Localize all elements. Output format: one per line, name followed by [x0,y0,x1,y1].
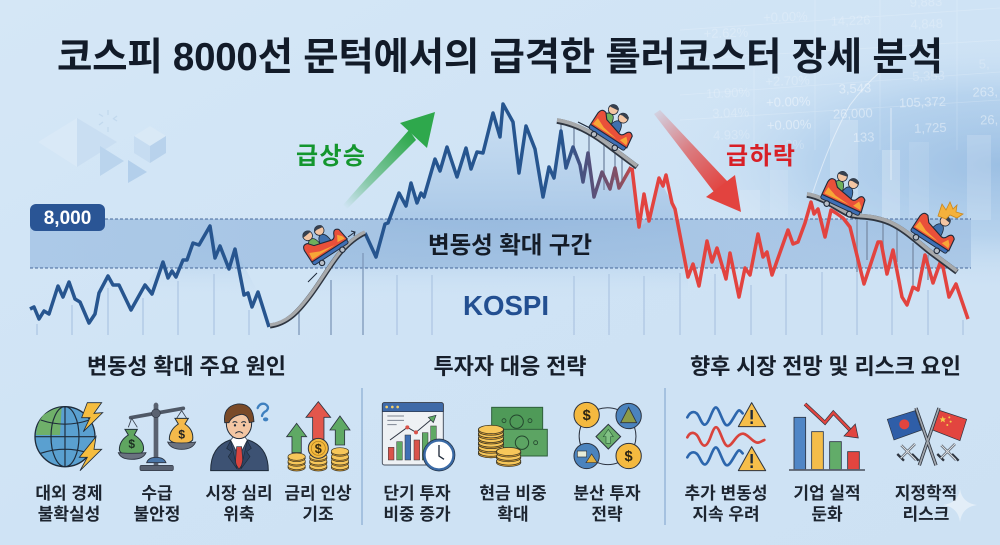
label: external uncertainty: 대외 경제 [35,484,103,503]
background: market data panel: 4,848 [910,16,943,32]
panel: outlook and risks [685,354,967,524]
label: short-term: 단기 투자 [383,484,451,503]
background: market data panel: 10.90% [706,85,751,101]
coaster track: first drop [557,120,637,167]
label: cash: 확대 [497,505,529,524]
label: short-term: 비중 증가 [383,505,451,524]
section dividers [362,388,665,525]
background: market data panel: +0.00% [766,93,811,110]
coaster car: last drop [908,202,964,259]
panel: investor strategy [382,354,641,524]
background: market data panel: 263, [972,84,998,100]
icon: interest rate rise [287,402,350,471]
arrow: surge [343,112,435,209]
icon: earnings decline bars [789,404,865,470]
icon: crossed flags and swords [887,408,967,465]
chart: KOSPI roller coaster [30,99,971,335]
panel: causes [35,354,352,524]
title: 코스피 8000선 문턱에서의 급격한 롤러코스터 장세 분석 [57,36,943,79]
background: market data panel: 14,226 [830,12,871,29]
icon: globe with lightning [35,403,103,471]
label: geopolitical risk: 지정학적 [895,484,957,503]
label: earnings slowdown: 둔화 [811,505,843,524]
badge: 8,000: 8,000 [44,208,91,229]
icon: diversification: $ [625,449,633,465]
background: market data panel: +0.00% [763,8,808,25]
volatility band [30,219,971,268]
background: market data panel [650,0,1000,300]
label: plunge: 급하락 [726,143,795,170]
coaster car: first drop [578,99,643,156]
background: geometric shapes [38,110,166,183]
label: supply demand: 불안정 [134,505,180,524]
label: diversification: 전략 [591,505,623,524]
index line: plunge [632,168,968,319]
background: market data panel: 3.04% [712,105,750,121]
label: external uncertainty: 불확실성 [38,505,100,524]
background: market data panel: 26,000 [833,105,873,122]
label: further volatility: 지속 우려 [692,505,760,524]
label: diversification: 분산 투자 [573,484,641,503]
background: market data panel: 4.93% [713,127,751,143]
label: KOSPI: KOSPI [463,290,549,321]
badge: 8,000 [30,204,105,231]
coaster car: climbing [296,215,355,282]
index line: surge [365,104,631,257]
icon: diversification: $ [583,408,591,424]
background: market data panel: 5, [978,56,990,72]
heading: causes: 변동성 확대 주요 원인 [87,354,286,379]
time axis ticks [37,253,963,335]
decorative sparkle [943,489,977,522]
label: supply demand: 수급 [141,484,173,503]
label: sentiment: 위축 [223,505,255,524]
icon: scale with money bags: $ [178,428,185,442]
coaster car: second hill [818,167,874,221]
background: market data panel: 3,543 [838,80,871,96]
background: market data panel: 133 [853,129,875,145]
support struts [561,122,928,285]
background: market data panel: 26, [980,112,998,128]
coaster track: second drop [807,194,957,272]
icon: cash and coins [478,407,547,467]
label: volatility zone: 변동성 확대 구간 [428,232,592,258]
label: rates: 금리 인상 [284,484,352,503]
heading: outlook: 향후 시장 전망 및 리스크 요인 [690,354,961,379]
label: rates: 기조 [302,505,334,524]
icon: volatility waves with warnings [687,403,766,471]
background: market data panel: 1,725 [914,120,947,136]
icon: scale with money bags: $ [128,437,135,451]
coaster track: climb [270,232,365,326]
index line: rise [30,226,269,327]
icon: scale with money bags [118,403,196,471]
background: market data panel: +0.00% [767,116,812,133]
background: market data panel: +2.62% [703,25,749,41]
heading: strategy: 투자자 대응 전략 [434,354,586,379]
label: geopolitical risk: 리스크 [903,505,949,524]
arrow: plunge [654,110,741,212]
label: sentiment: 시장 심리 [205,484,273,503]
background: market data panel: 105,372 [899,94,946,110]
icon: short-term chart with clock [382,403,455,471]
label: cash: 현금 비중 [479,484,547,503]
area under index line [30,104,688,335]
background: market data panel: 5,353 [912,68,945,84]
icon: diversification [574,402,641,469]
label: earnings slowdown: 기업 실적 [793,484,861,503]
label: surge: 급상승 [296,143,365,170]
icon: worried investor [211,404,268,471]
label: further volatility: 추가 변동성 [685,484,767,503]
background: market data panel: +2.70% [765,72,811,89]
icon: interest rate rise: $ [315,442,322,456]
background: market data panel: 3% [785,137,805,152]
